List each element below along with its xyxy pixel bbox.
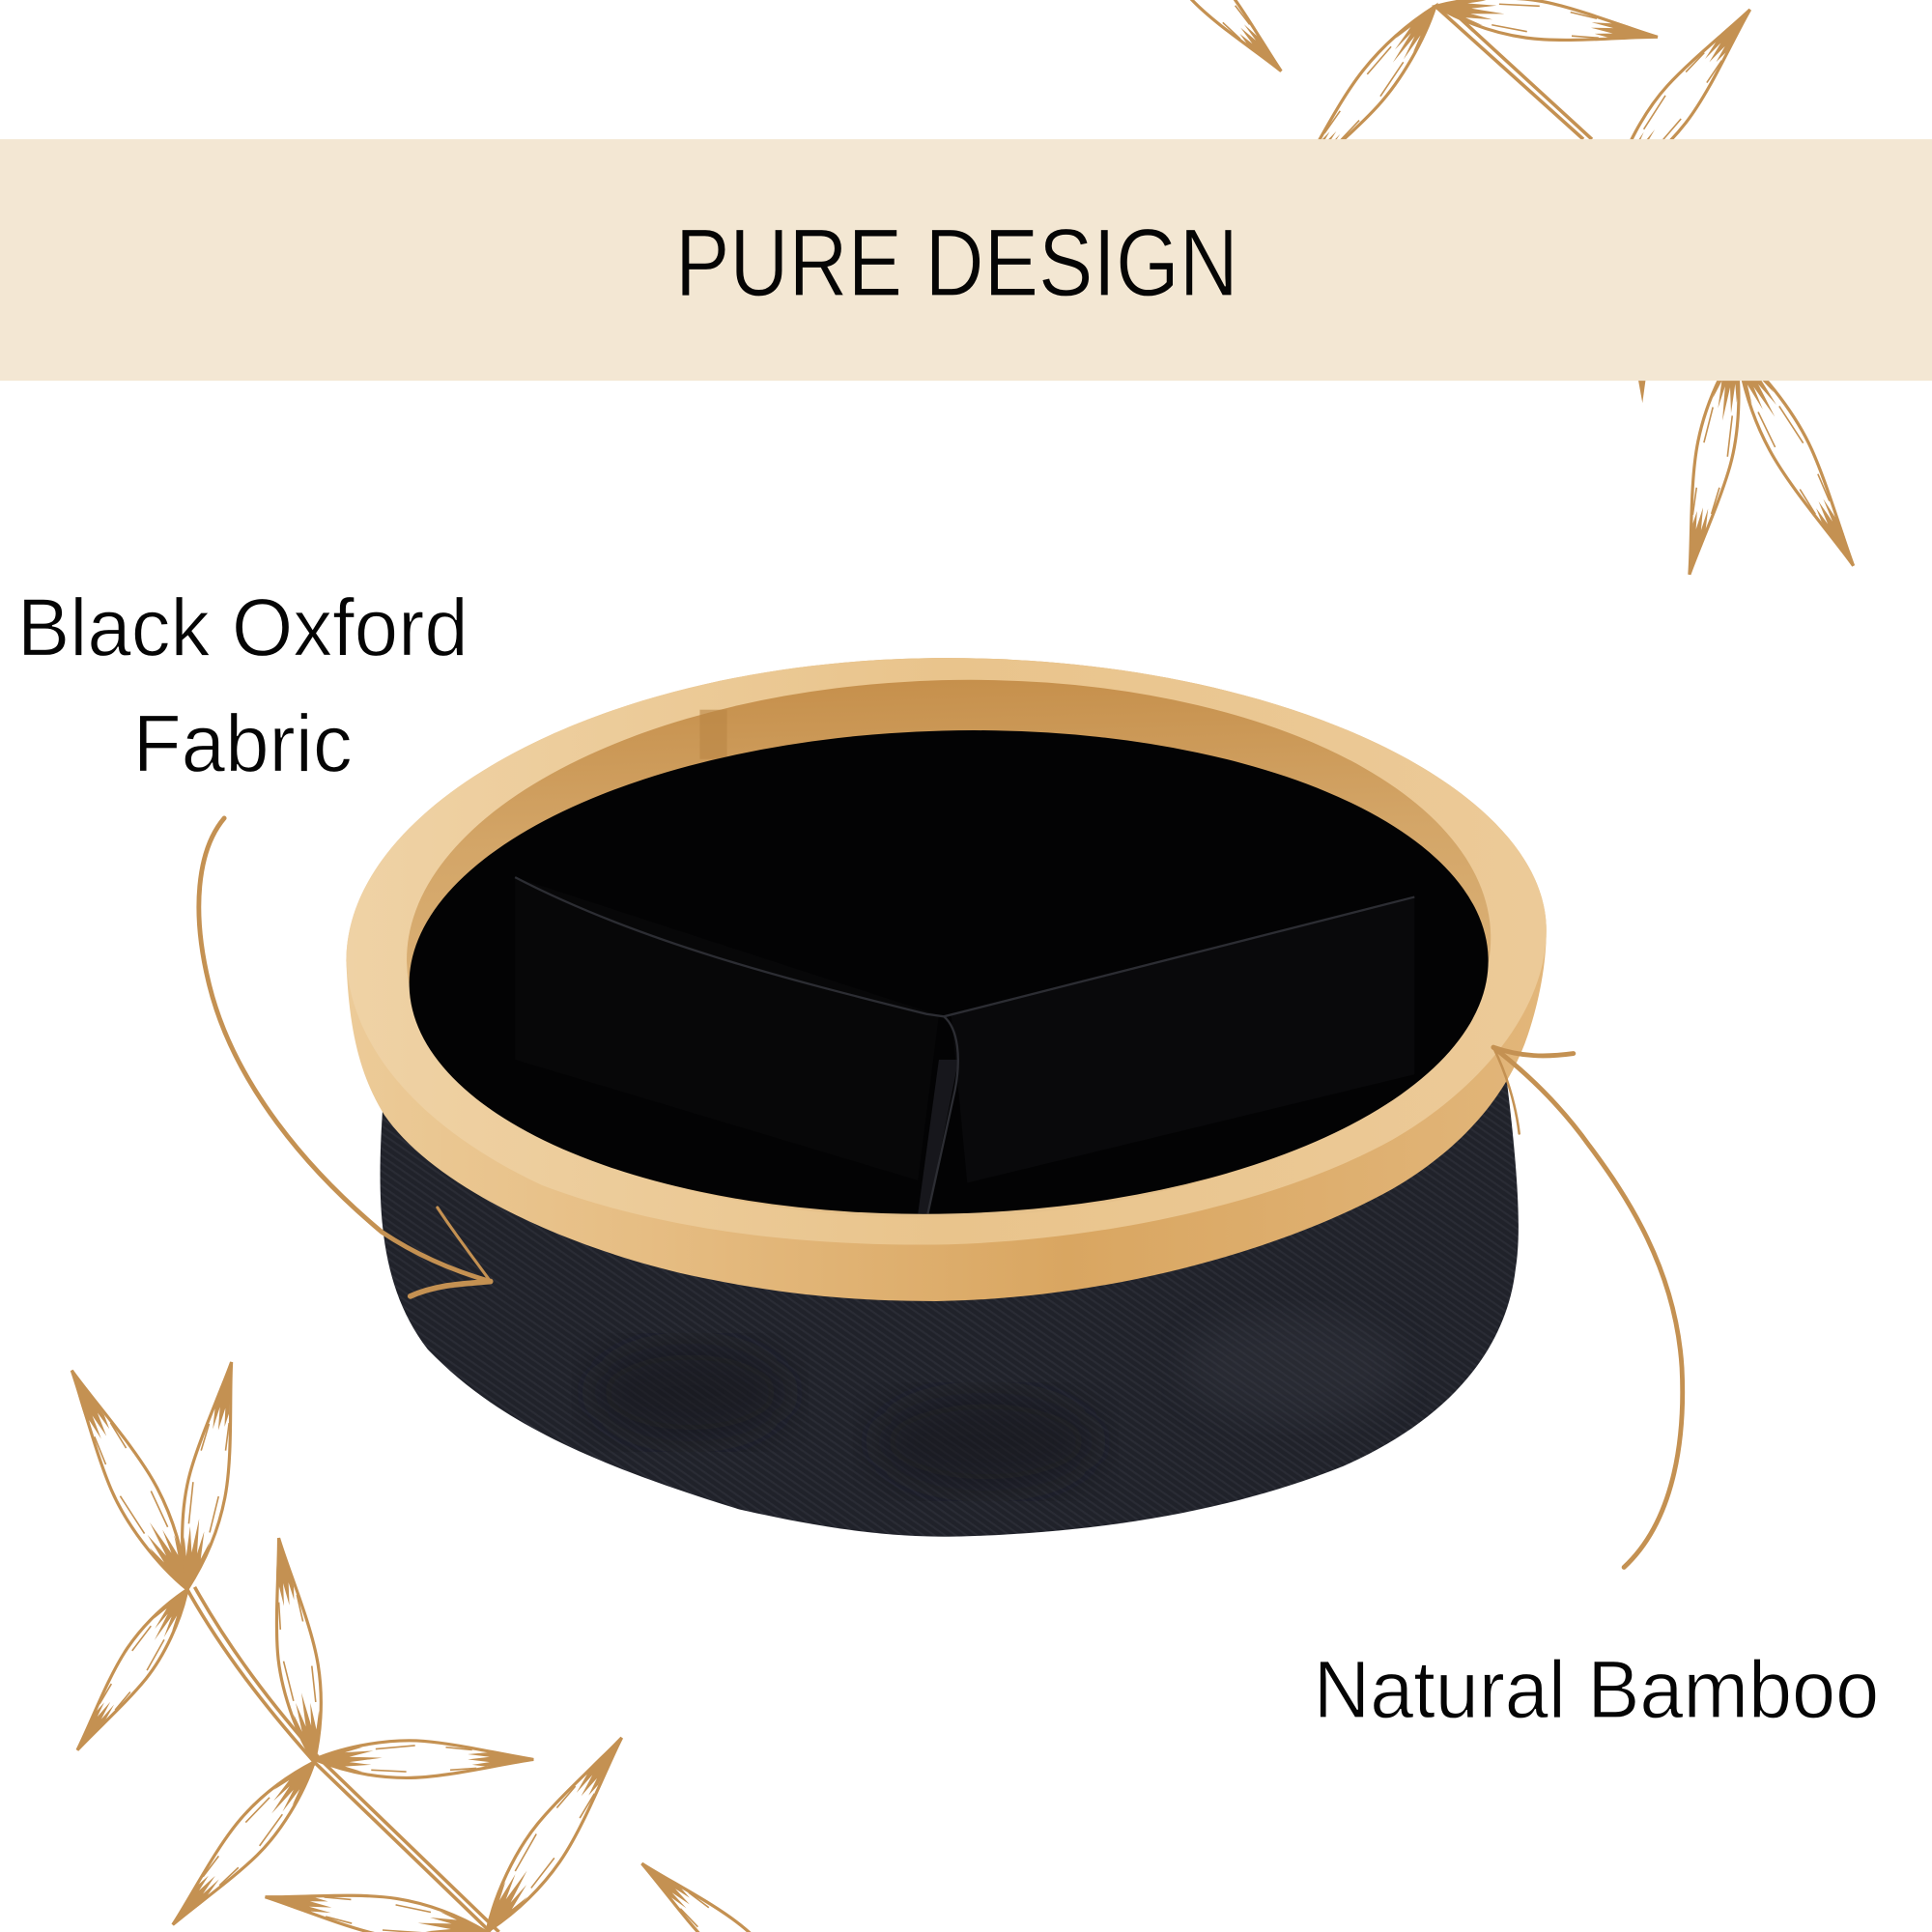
- label: black oxford fabric: Fabric: [133, 697, 353, 788]
- center strip: [918, 1060, 958, 1213]
- title banner: [0, 139, 1932, 381]
- bamboo rim inner wall: [400, 666, 1497, 1232]
- left divider: [515, 877, 939, 1180]
- bamboo rim outer lip: [346, 658, 1547, 1301]
- divider seams: [515, 877, 1414, 1213]
- arrow: to fabric: [199, 818, 491, 1296]
- label: natural bamboo: Natural Bamboo: [1314, 1644, 1879, 1735]
- right divider: [952, 897, 1414, 1182]
- label: black oxford fabric: Black Oxford: [17, 582, 469, 673]
- arrow: to bamboo: [1493, 1047, 1683, 1567]
- basket interior: [403, 717, 1494, 1228]
- bamboo rim top face: [346, 658, 1547, 1245]
- title: PURE DESIGN: [675, 210, 1238, 317]
- decoration: bamboo sprig top right: [1134, 0, 1870, 579]
- decoration: bamboo sprig bottom left: [53, 1358, 812, 1932]
- fabric body: [381, 1072, 1519, 1537]
- product: round bamboo and fabric basket: [346, 658, 1547, 1537]
- label: black oxford fabric: [17, 582, 469, 788]
- bamboo node mark: [699, 710, 727, 759]
